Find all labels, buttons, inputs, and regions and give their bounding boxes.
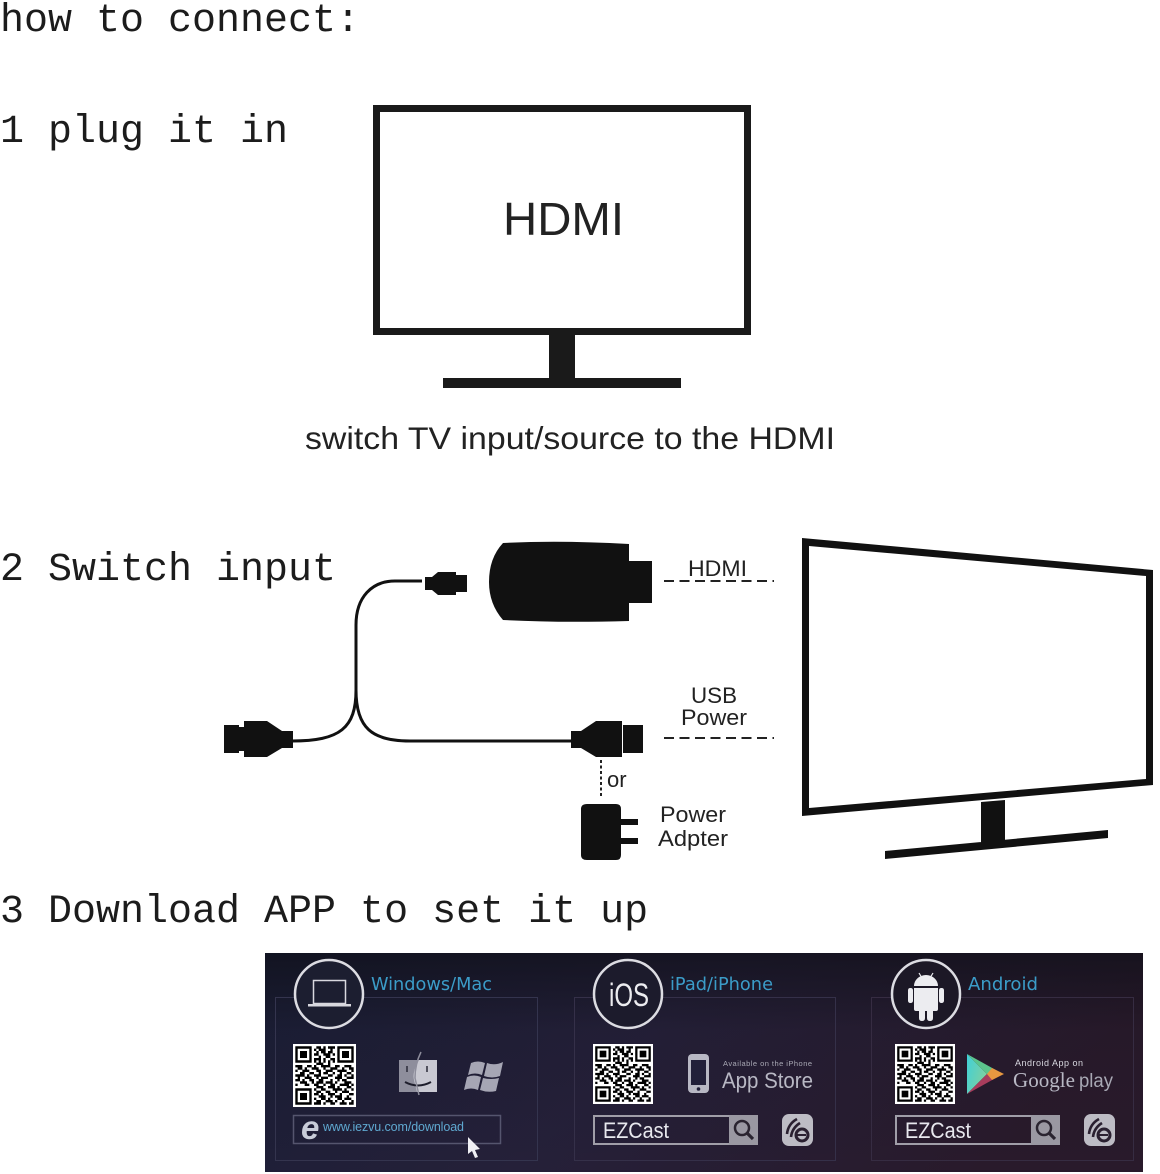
- connector: left USB plug: [224, 721, 293, 757]
- search box: EZCast: EZCast: [905, 1118, 971, 1143]
- TV screen frame: [802, 538, 1153, 816]
- label: Power Adapter: Adpter: [658, 826, 728, 851]
- dashed leader: HDMI: [664, 580, 774, 582]
- connector: HDMI plug: [425, 572, 467, 595]
- heading: Windows/Mac: Windows/Mac: [371, 974, 492, 995]
- icon: EZCast app: [1084, 1114, 1115, 1146]
- heading: step 2: 2 Switch input: [0, 548, 336, 593]
- URL text: www.iezvu.com/download: [322, 1120, 464, 1134]
- label: App Store: App Store: [722, 1068, 813, 1093]
- dotted connector: [600, 760, 602, 798]
- illustration: HDMI monitor: [376, 108, 748, 388]
- icon: Google Play triangle: [967, 1054, 1004, 1094]
- dashed leader: USB: [664, 737, 774, 739]
- icon: cursor: [468, 1137, 480, 1158]
- label: USB Power: [681, 683, 747, 730]
- search box: EZCast: EZCast: [603, 1118, 669, 1143]
- QR code: [895, 1044, 955, 1104]
- label: Google play: Google: [1013, 1068, 1075, 1092]
- search box: EZCast: [594, 1115, 758, 1145]
- monitor stand: [443, 335, 681, 388]
- label: HDMI: HDMI: [503, 193, 624, 245]
- heading: how to connect: how to connect:: [0, 0, 360, 44]
- TV stand: [885, 800, 1108, 859]
- QR code: [293, 1044, 356, 1107]
- icon: iOS circle: iOS: [609, 977, 649, 1013]
- caption: switch TV input: switch TV input/source to the HDMI: [305, 420, 835, 456]
- panel: app download banner: [265, 953, 1143, 1172]
- icon: Windows logo: [464, 1062, 503, 1092]
- label: or: or: [607, 767, 627, 792]
- icon: browser e: e: [301, 1109, 319, 1146]
- connector: right USB plug: [571, 721, 643, 757]
- label: Google play: Android App on: [1015, 1058, 1083, 1068]
- heading: Android: Android: [968, 974, 1038, 995]
- label: Google play: play: [1079, 1071, 1113, 1092]
- illustration: angled TV: [802, 538, 1153, 859]
- label: Power Adapter: Power: [660, 802, 726, 827]
- label: HDMI: HDMI: [688, 556, 747, 581]
- search box: EZCast: [896, 1115, 1060, 1145]
- icon: iOS circle: [594, 960, 662, 1028]
- QR code: [593, 1044, 653, 1104]
- heading: step 3: 3 Download APP to set it up: [0, 890, 648, 935]
- icon: laptop circle: [295, 960, 363, 1028]
- URL box: [294, 1109, 500, 1146]
- heading: iPad/iPhone: iPad/iPhone: [670, 974, 773, 995]
- icon: HDMI dongle: [489, 542, 652, 622]
- icon: Android circle: [892, 960, 960, 1028]
- icon: power adapter: [581, 804, 638, 860]
- icon: iPhone: [688, 1054, 709, 1093]
- monitor screen frame: [376, 108, 748, 332]
- illustration: dongle and cable wiring: [224, 542, 774, 860]
- label: Google play: [1013, 1058, 1113, 1092]
- label: USB Power: USB: [691, 683, 737, 708]
- column: Windows/Mac: [276, 960, 538, 1160]
- label: USB Power: Power: [681, 705, 747, 730]
- column: Android: [872, 960, 1134, 1160]
- heading: step 1: 1 plug it in: [0, 110, 288, 155]
- column: iPad/iPhone: [574, 960, 836, 1160]
- icon: EZCast app: [782, 1114, 813, 1146]
- label: App Store: [722, 1059, 813, 1093]
- icon: Finder: [399, 1052, 437, 1095]
- label: App Store: Available on the iPhone: [723, 1059, 812, 1068]
- label: Power Adapter: [658, 802, 728, 851]
- Y cable: [292, 581, 572, 741]
